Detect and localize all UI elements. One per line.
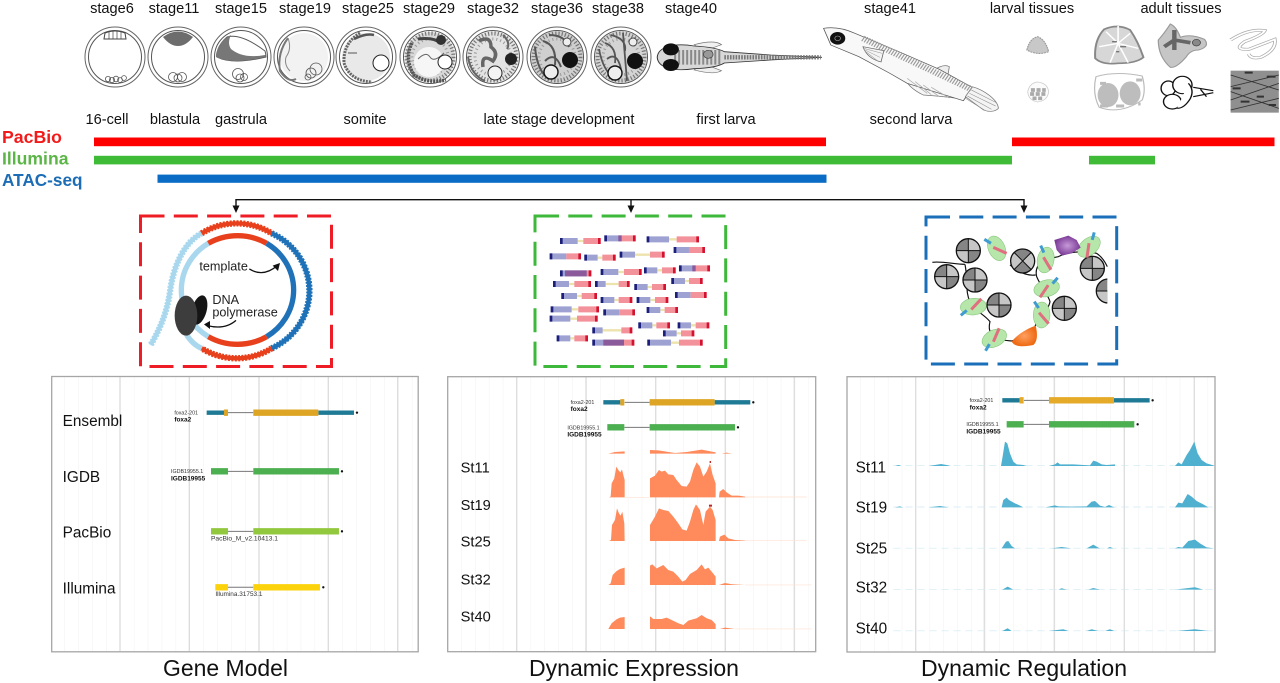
developmental phase labels: blastula: [150, 112, 201, 128]
icon: stage11 embryo: [148, 27, 208, 87]
coverage bars: [94, 138, 1274, 183]
expression label St11: St11: [461, 460, 490, 476]
coverage: second track: [609, 461, 807, 497]
stage labels row: stage40: [665, 1, 717, 17]
stage labels row: adult tissues: [1140, 1, 1222, 17]
gene tracks: foxa2: [970, 404, 987, 411]
method labels: ATAC-seq: [2, 170, 83, 190]
accessibility: St40: [1002, 628, 1208, 631]
icon: adult tissue brain: [1161, 76, 1213, 109]
regulation label St32: St32: [856, 579, 887, 596]
developmental phase labels: second larva: [870, 112, 953, 128]
track: PacBio: [63, 525, 343, 542]
icon: stage40 larva: [657, 42, 822, 73]
method labels: [2, 127, 83, 190]
icon: stage36 embryo: [527, 27, 587, 87]
label: DNA polymerase: DNA: [212, 293, 239, 307]
regulation label St25: St25: [856, 540, 887, 557]
stage labels row: stage36: [531, 1, 583, 17]
stage labels row: stage15: [215, 1, 267, 17]
stage labels row: stage38: [592, 1, 644, 17]
icon: stage19 embryo: [274, 27, 334, 87]
developmental phase labels: late stage development: [484, 112, 634, 128]
icon: adult tissue intestine: [1231, 30, 1275, 58]
coverage: third track: [609, 504, 807, 541]
panel: expression browser: [448, 377, 816, 652]
embryo illustrations: [85, 27, 651, 87]
title: Gene Model: Gene Model: [163, 655, 288, 681]
title: Dynamic Expression: Dynamic Expression: [529, 655, 739, 681]
gene tracks: IGDB19955: [966, 428, 1001, 435]
stage labels row: stage11: [149, 1, 199, 17]
accessibility baselines: [893, 466, 1214, 631]
accessibility: St25: [1002, 540, 1214, 548]
arrows to method panels: [232, 200, 1028, 213]
track: PacBio: PacBio: [63, 525, 111, 542]
track: Illumina: [63, 580, 324, 598]
stage labels row: [90, 1, 1222, 17]
gene tracks: IGDB19955.1: [567, 425, 600, 431]
icon: adult tissue lobed organ: [1095, 26, 1143, 64]
label: template: template: [199, 259, 248, 273]
track: IGDB: [63, 469, 343, 486]
icon: adult tissue section: [1095, 73, 1144, 110]
method labels: PacBio: [2, 127, 62, 147]
panel: gene model browser: [52, 376, 418, 652]
method labels: Illumina: [2, 148, 69, 168]
gene tracks: IGDB19955: [567, 432, 602, 439]
gene tracks: IGDB19955.1: [966, 422, 999, 428]
regulation label St40: St40: [856, 620, 887, 637]
gene tracks: foxa2-201: [970, 398, 993, 404]
icon: orange factor: [1012, 326, 1037, 346]
arrow: template: [249, 263, 280, 273]
expression label St32: St32: [461, 572, 491, 588]
track: IGDB: IGDB: [63, 469, 100, 486]
gene tracks: [567, 400, 754, 439]
stage labels row: stage19: [279, 1, 331, 17]
icon: stage38 embryo: [591, 27, 651, 87]
developmental phase labels: first larva: [696, 112, 756, 128]
arrow: polymerase: [204, 320, 236, 329]
expression label St19: St19: [461, 498, 491, 514]
icon: stage41 larva: [824, 28, 998, 111]
diagram: paired-end reads: [550, 238, 710, 343]
accessibility: St32: [1002, 587, 1203, 590]
panel: Illumina sequencing: [535, 216, 726, 366]
icon: stage6 embryo: [85, 27, 145, 87]
icon: stage32 embryo: [463, 27, 523, 87]
track: IGDB: IGDB19955: [171, 476, 206, 483]
coverage: top track: [608, 450, 732, 454]
gene tracks: foxa2: [571, 406, 588, 413]
coverage: fourth track: [608, 564, 812, 585]
expression label St40: St40: [461, 610, 491, 626]
developmental phase labels: 16-cell: [86, 112, 128, 128]
icon: larval tissue bottom: [1028, 82, 1049, 102]
icon: larval tissue top: [1027, 37, 1049, 53]
stage labels row: stage6: [90, 1, 134, 17]
icon: purple factor: [1054, 236, 1081, 256]
stage labels row: stage29: [403, 1, 455, 17]
icon: stage29 embryo: [400, 27, 460, 87]
coverage: fifth track: [608, 615, 812, 629]
track: Ensembl: foxa2-201: [174, 410, 198, 416]
track: Illumina: Illumina.31753.1: [215, 591, 263, 598]
fish and tissue illustrations: [657, 24, 1279, 113]
label: DNA polymerase: polymerase: [212, 305, 278, 319]
icon: adult tissue heart: [1158, 24, 1206, 67]
icon: polymerase: [175, 294, 210, 336]
panel: regulation browser: [847, 377, 1215, 652]
stage labels row: stage41: [864, 1, 916, 17]
regulation label St19: St19: [856, 499, 887, 516]
track: Ensembl: [63, 410, 358, 430]
track: IGDB: IGDB19955.1: [171, 469, 203, 475]
panel: ATAC-seq chromatin: [926, 217, 1120, 364]
icon: adult tissue muscle: [1231, 71, 1279, 113]
gene tracks: foxa2-201: [571, 400, 594, 406]
developmental phase labels: somite: [344, 112, 386, 128]
title: Dynamic Regulation: Dynamic Regulation: [921, 655, 1127, 681]
gene tracks: [966, 398, 1154, 435]
regulation label St11: St11: [856, 459, 886, 476]
stage labels row: stage25: [342, 1, 394, 17]
diagram: nucleosomes and transcription factors: [932, 230, 1120, 351]
icon: stage25 embryo: [336, 27, 396, 87]
accessibility: St19: [895, 494, 1208, 507]
accessibility: St11: [895, 442, 1214, 466]
track: Ensembl: Ensembl: [63, 413, 122, 430]
track: Illumina: Illumina: [63, 580, 116, 597]
stage labels row: larval tissues: [990, 1, 1074, 17]
diagram: circular consensus template: [151, 223, 309, 358]
developmental phase labels: gastrula: [215, 112, 268, 128]
icon: stage15 embryo: [211, 27, 271, 87]
track: PacBio: PacBio_M_v2.10413.1: [211, 535, 278, 542]
expression label St25: St25: [461, 535, 491, 551]
track: Ensembl: foxa2: [174, 417, 192, 424]
panel: PacBio sequencing: [140, 216, 332, 366]
stage labels row: stage32: [467, 1, 519, 17]
developmental phase labels: [86, 112, 953, 128]
